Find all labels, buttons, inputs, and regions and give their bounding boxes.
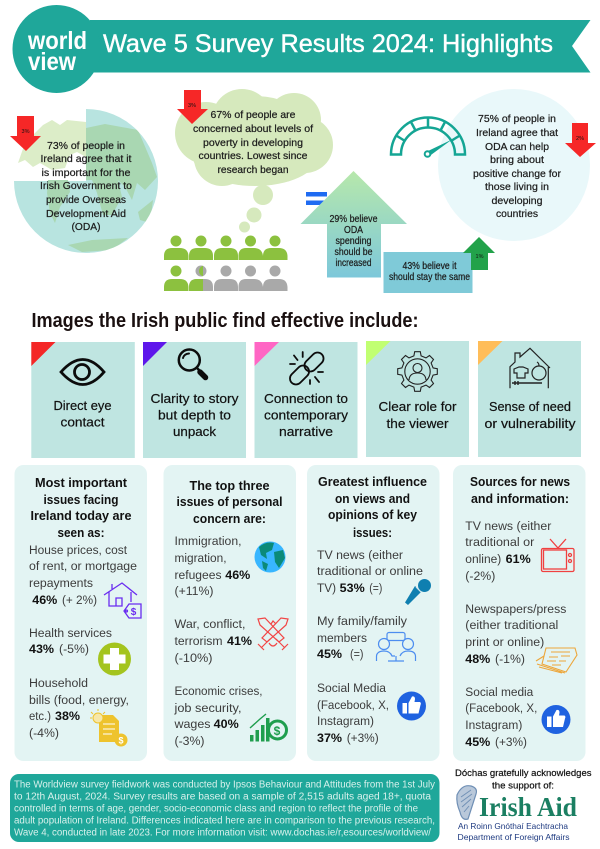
issue: household bills: etc.) — [29, 709, 51, 723]
icon: harp — [457, 786, 476, 819]
influence: TV news: TV) — [317, 581, 336, 595]
icon: house with price tag — [104, 583, 141, 618]
influence: TV news: TV news (either — [317, 548, 403, 562]
influence: social media: Social Media — [317, 681, 386, 695]
thought cloud: 67% concerned — [175, 89, 333, 232]
heading: and information: — [471, 491, 569, 506]
green arrow: up 1%: 1% — [476, 254, 484, 260]
heading — [318, 474, 427, 540]
card: connection to narrative: contemporary — [264, 408, 349, 422]
source: social media: Instagram) — [465, 718, 522, 732]
icon: bills — [90, 709, 128, 746]
department text: Department of Foreign Affairs — [458, 832, 570, 842]
card: connection to narrative: Connection to — [264, 392, 348, 406]
issue: immigration: refugees — [174, 568, 222, 582]
card: sense of need: or vulnerability — [484, 417, 576, 431]
thought bubbles — [239, 185, 273, 232]
issue: health: 43% — [29, 642, 54, 656]
heading — [470, 474, 570, 506]
source: social media: (Facebook, X, — [465, 701, 537, 715]
issue: housing: repayments — [29, 576, 93, 590]
influence: social media — [317, 681, 389, 745]
acknowledgement text: the support of: — [492, 780, 554, 792]
influence: TV news: 53% — [340, 581, 365, 595]
card: sense of need: Sense of need — [489, 400, 571, 414]
heading: Most important — [35, 475, 128, 490]
panel: most important issues — [14, 465, 147, 761]
icon: newspaper — [536, 648, 577, 673]
card: clarity to story: but depth to — [158, 408, 231, 422]
influence: social media: (Facebook, X, — [317, 698, 389, 712]
circle: 75% ODA helps — [438, 89, 590, 241]
arrow text: 29% believe — [330, 214, 378, 225]
card: clear role for viewer — [366, 341, 469, 457]
panel: greatest influence — [307, 465, 440, 761]
issue: war: War, conflict, — [174, 617, 246, 631]
source: TV: online) — [465, 552, 501, 566]
source: TV: (-2%) — [465, 569, 495, 583]
equals sign — [306, 192, 327, 205]
issue: immigration: migration, — [174, 551, 226, 565]
red arrow: down 3% — [177, 90, 208, 124]
red arrow: down 3%: 3% — [22, 129, 30, 135]
issue: household bills: Household — [29, 676, 88, 690]
circle text: ODA can help — [485, 141, 549, 153]
icon: house with price tag: $ — [131, 607, 137, 618]
arrow text: should be — [334, 247, 373, 258]
title: Wave 5 Survey Results 2024: Highlights — [103, 30, 553, 58]
icon: microphone — [405, 579, 431, 605]
globe text: provide Overseas — [46, 194, 126, 206]
icon: gauge — [391, 117, 465, 157]
footer methodology note: The Worldview survey fieldwork was conducted by Ipsos Behaviour and Attitudes from the 1st July — [14, 780, 435, 790]
globe text: 73% of people in — [47, 140, 125, 152]
acknowledgement text: Dóchas gratefully acknowledges — [455, 768, 592, 779]
icon: finance chart: $ — [274, 724, 281, 738]
circle text: countries — [496, 208, 538, 220]
influence: family: members — [317, 631, 367, 645]
icon: health cross — [98, 642, 131, 676]
globe text — [40, 140, 132, 233]
issue: economy: job security, — [173, 701, 242, 715]
Irish Aid wordmark: Irish Aid — [479, 792, 577, 822]
heading: issues: — [353, 525, 392, 540]
issue: household bills: (-4%) — [29, 726, 59, 740]
card: clarity to story — [143, 342, 246, 458]
footer methodology note: Wave 4, conducted in late 2023. For more information visit: www.dochas.ie/r,esources/worldview/ — [14, 828, 431, 838]
circle text: 75% of people in — [478, 113, 556, 125]
issue: health — [29, 626, 112, 656]
issue: housing: of rent, or mortgage — [29, 559, 137, 573]
heading: issues facing — [44, 492, 119, 507]
issue: war — [174, 617, 252, 665]
card: clear role for viewer: Clear role for — [378, 400, 456, 414]
icon: gear with person — [398, 352, 437, 391]
cloud text: poverty in developing — [203, 137, 303, 149]
people pictogram — [164, 236, 288, 291]
department text: An Roinn Gnóthaí Eachtracha — [458, 821, 568, 831]
circle text: bring about — [490, 154, 544, 166]
influence: social media: Instagram) — [317, 714, 374, 728]
red arrow: down 2% — [565, 123, 596, 157]
cloud shape — [175, 89, 333, 186]
heading: Sources for news — [470, 474, 570, 489]
globe text: is important for the — [42, 167, 131, 179]
cloud text: concerned about levels of — [193, 123, 313, 135]
issue: war: (-10%) — [174, 651, 212, 665]
issue: household bills — [29, 676, 129, 740]
card: clarity to story: Clarity to story — [150, 392, 239, 406]
acknowledgement — [455, 768, 592, 842]
source: social media: 45% — [465, 735, 490, 749]
footer methodology note: controlled in terms of age, gender, socio-economic class and region to reflect the profile of the — [14, 804, 418, 814]
influence: family — [317, 614, 408, 661]
influence: family: 45% — [317, 647, 342, 661]
icon: thumbs up — [542, 705, 570, 734]
globe: 73% ODA support — [10, 109, 158, 253]
icon: house with needs — [510, 348, 550, 388]
source: newspapers: Newspapers/press — [465, 602, 566, 616]
issue: economy: wages — [173, 717, 210, 731]
icon: finance chart — [250, 714, 286, 742]
heading: issues of personal — [176, 494, 282, 509]
icon: magnifying glass — [179, 350, 206, 378]
arrow text: spending — [336, 236, 372, 247]
globe text: Ireland agree that it — [40, 153, 132, 165]
issue: immigration: Immigration, — [174, 534, 242, 548]
influence: TV news — [317, 548, 423, 595]
heading — [176, 478, 282, 526]
box: 43% stay the same — [384, 252, 472, 293]
logo text: world — [27, 27, 87, 55]
influence: family: (=) — [350, 647, 364, 661]
department text — [458, 821, 570, 842]
issue: health: (-5%) — [59, 642, 89, 656]
box: 43% stay the same: 43% believe it — [402, 261, 457, 272]
card: connection to narrative — [254, 342, 358, 458]
arrow text: ODA — [344, 225, 363, 236]
card: connection to narrative: narrative — [279, 425, 333, 439]
source: newspapers — [465, 602, 566, 666]
issue: health: Health services — [29, 626, 112, 640]
source: newspapers: (-1%) — [495, 652, 525, 666]
source: social media: Social media — [465, 685, 534, 699]
icon: television — [542, 539, 574, 572]
icon: family conversation — [376, 632, 416, 661]
issue: war: terrorism — [174, 634, 222, 648]
issue: housing — [29, 543, 137, 607]
issue: war: 41% — [227, 634, 252, 648]
header banner — [12, 5, 590, 93]
circle text: those living in — [485, 181, 549, 193]
source: social media — [465, 685, 537, 749]
source: TV: TV news (either — [465, 519, 551, 533]
source: TV: 61% — [506, 552, 531, 566]
source: newspapers: (either traditional — [465, 618, 558, 632]
issue: housing: House prices, cost — [29, 543, 128, 557]
panel: news sources — [453, 465, 586, 761]
heading: seen as: — [58, 525, 104, 540]
circle text — [473, 113, 561, 220]
card: clarity to story: unpack — [173, 425, 217, 439]
issue: household bills: 38% — [55, 709, 80, 723]
globe text: Development Aid — [46, 208, 126, 220]
red arrow: down 3% — [10, 116, 41, 151]
influence: social media: 37% — [317, 731, 342, 745]
circle text: Ireland agree that — [476, 127, 558, 139]
issue: immigration — [174, 534, 250, 598]
heading: The top three — [190, 478, 270, 493]
globe text: Irish Government to — [40, 180, 132, 192]
green arrow: up 1% — [463, 237, 495, 270]
heading — [30, 475, 132, 540]
globe graphic — [14, 109, 158, 253]
heading: Greatest influence — [318, 474, 427, 489]
heading: concern are: — [193, 511, 266, 526]
heading: on views and — [335, 491, 410, 506]
issue: housing: (+ 2%) — [62, 593, 97, 607]
cloud text: countries. Lowest since — [198, 150, 308, 162]
influence: social media: (+3%) — [347, 731, 379, 745]
card: direct eye contact: contact — [60, 416, 105, 430]
influence: family: My family/family — [317, 614, 408, 628]
card: direct eye contact: Direct eye — [54, 399, 112, 413]
red arrow: down 3%: 3% — [188, 103, 196, 109]
issue: economy: (-3%) — [174, 734, 204, 748]
source: TV — [465, 519, 551, 583]
card: sense of need — [478, 341, 581, 457]
icon: bills: $ — [118, 736, 124, 746]
icon: eye — [61, 360, 104, 384]
icon: crossed swords — [258, 618, 288, 650]
source: newspapers: print or online) — [465, 635, 544, 649]
box: 43% stay the same: should stay the same — [389, 272, 470, 283]
icon: earth — [254, 542, 286, 572]
logo text — [27, 27, 87, 76]
icon: thumbs up — [397, 692, 426, 720]
issue: economy: Economic crises, — [174, 684, 262, 698]
source: TV: traditional or — [465, 535, 534, 549]
footer methodology note: adult population of Ireland. Differences indicated here are in comparison to the previous research, — [14, 816, 435, 826]
issue: immigration: (+11%) — [174, 584, 214, 598]
issue: immigration: 46% — [225, 568, 250, 582]
influence: TV news: traditional or online — [317, 564, 423, 578]
cloud text — [193, 109, 313, 176]
cloud text: research began — [218, 164, 289, 176]
acknowledgement text — [455, 768, 592, 792]
up arrow: 29% increase — [300, 171, 407, 278]
card: clear role for viewer: the viewer — [386, 417, 448, 431]
arrow text: increased — [336, 258, 372, 269]
red arrow: down 2%: 2% — [576, 136, 584, 142]
icon: broken link — [287, 350, 326, 387]
globe text: (ODA) — [72, 221, 100, 233]
ribbon — [90, 20, 590, 72]
heading: Ireland today are — [30, 508, 132, 523]
section heading: Images the Irish public find effective include: — [32, 310, 418, 332]
influence: TV news: (=) — [369, 581, 382, 595]
circle text: developing — [492, 195, 543, 207]
logo circle — [12, 5, 100, 93]
cloud text: 67% of people are — [210, 109, 296, 121]
arrow text — [330, 214, 378, 269]
source: newspapers: 48% — [465, 652, 490, 666]
footer methodology note — [10, 774, 440, 842]
issue: household bills: bills (food, energy, — [29, 693, 129, 707]
issue: housing: 46% — [32, 593, 57, 607]
logo text: view — [28, 48, 76, 76]
issue: economy: 40% — [214, 717, 239, 731]
heading: opinions of key — [328, 507, 418, 522]
source: social media: (+3%) — [495, 735, 527, 749]
circle text: positive change for — [473, 168, 561, 180]
issue: economy — [173, 684, 262, 748]
panel: personal concern — [164, 465, 296, 761]
card: direct eye contact — [31, 342, 135, 458]
footer methodology note: to 12th August, 2024. Survey results are based on a sample of 2,515 adults aged 18+, quota — [14, 792, 431, 802]
